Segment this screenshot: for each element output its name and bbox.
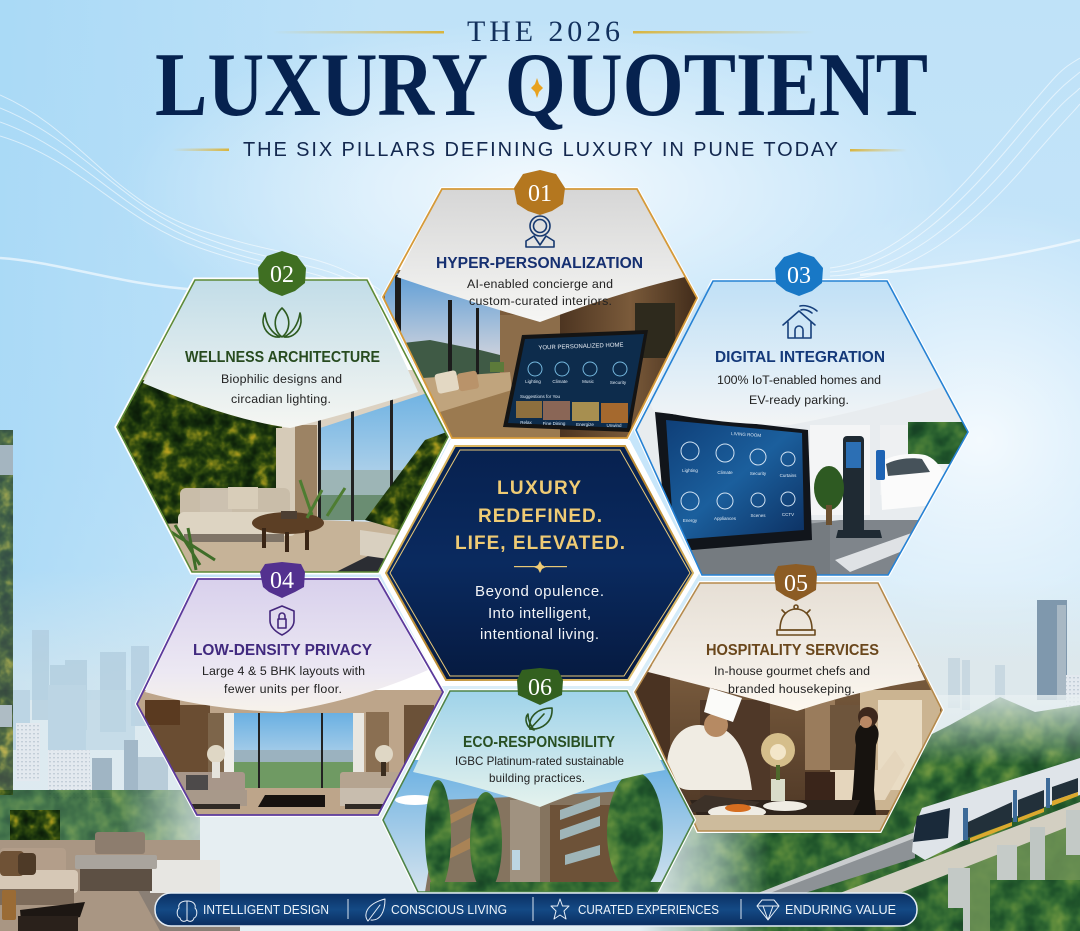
text block — [714, 664, 870, 696]
tablet: Fine Dining — [543, 421, 566, 426]
tablet: Lighting — [525, 379, 541, 384]
number badge 02: 02 — [270, 262, 294, 288]
number badge 05: 05 — [784, 571, 808, 597]
text block: building practices. — [489, 772, 585, 785]
tablet: Music — [582, 379, 595, 384]
panel: 03 digital integration: Lighting — [682, 468, 698, 473]
metro viaduct — [758, 802, 1080, 931]
icon: shield — [270, 606, 294, 635]
left skyline and terrace — [0, 430, 430, 931]
panel caption area — [145, 579, 428, 712]
panel: 06 eco-responsibility — [380, 691, 700, 895]
tablet: Unwind — [606, 423, 622, 428]
number badge 04 — [260, 562, 305, 598]
text block: AI-enabled concierge and — [467, 277, 613, 291]
text block: Into intelligent, — [488, 605, 591, 622]
heading: HOSPITALITY SERVICES — [706, 642, 879, 659]
value: curated experiences — [551, 899, 719, 919]
number badge 05 — [774, 564, 817, 601]
text block — [455, 755, 624, 785]
text block — [467, 277, 613, 308]
heading: LOW-DENSITY PRIVACY — [193, 642, 373, 659]
panel: 01 hyper-personalization — [380, 189, 700, 440]
panel caption area — [143, 280, 418, 428]
title: the 2026: THE 2026 — [467, 15, 620, 48]
text block — [475, 583, 604, 643]
value: curated experiences: CURATED EXPERIENCES — [578, 903, 719, 917]
text block: branded housekeping. — [728, 682, 855, 696]
value: conscious living — [366, 899, 507, 921]
panel caption area — [413, 691, 665, 807]
value: intelligent design — [177, 901, 329, 921]
heading: DIGITAL INTEGRATION — [715, 349, 885, 366]
panel: 03 digital integration: Appliances — [714, 516, 737, 521]
icon: cloche — [777, 605, 815, 635]
tablet: Energize — [576, 422, 594, 427]
value: enduring value — [757, 900, 896, 920]
text block: fewer units per floor. — [224, 682, 342, 696]
number badge 06 — [517, 668, 563, 705]
icon: lotus — [263, 308, 301, 337]
divider ornament — [514, 561, 567, 573]
metro train — [912, 758, 1080, 860]
panel: 03 digital integration: CCTV — [782, 512, 794, 517]
text block: EV-ready parking. — [749, 393, 849, 407]
text block — [717, 373, 881, 407]
panel: center message — [383, 443, 696, 683]
tablet: YOUR PERSONALIZED HOME — [538, 343, 624, 351]
tablet: Security — [610, 380, 627, 385]
title block — [155, 15, 928, 161]
tablet: Suggestions for You — [520, 394, 561, 399]
text block: In-house gourmet chefs and — [714, 664, 870, 678]
number badge 02 — [258, 251, 306, 296]
text block: custom-curated interiors. — [469, 294, 612, 308]
heading: LUXURY — [497, 478, 581, 499]
panel caption area — [648, 583, 925, 711]
panel: 03 digital integration: Curtains — [780, 473, 797, 478]
value: intelligent design: INTELLIGENT DESIGN — [203, 903, 329, 917]
subtitle: THE SIX PILLARS DEFINING LUXURY IN PUNE TODAY — [243, 139, 838, 161]
text block: Biophilic designs and — [221, 372, 342, 386]
panel: 03 digital integration: Energy — [683, 518, 698, 523]
tablet: Relax — [520, 420, 532, 425]
panel: 02 wellness architecture — [110, 280, 455, 575]
right hills, skyline and metro — [640, 580, 1080, 931]
title: luxury quotient: LUXURY QUOTIENT — [155, 34, 928, 135]
panel: 03 digital integration: LIVING ROOM — [731, 431, 761, 438]
text block — [221, 372, 342, 406]
text block: Beyond opulence. — [475, 583, 604, 600]
number badge 03 — [775, 252, 823, 296]
text block: 100% IoT-enabled homes and — [717, 373, 881, 387]
icon: leaves — [526, 708, 552, 730]
text block: IGBC Platinum-rated sustainable — [455, 755, 624, 768]
number badge 03: 03 — [787, 263, 811, 289]
icon: concierge — [526, 216, 554, 247]
text block: Large 4 & 5 BHK layouts with — [202, 664, 365, 678]
heading: REDEFINED. — [478, 506, 602, 527]
text block — [202, 664, 365, 696]
heading: WELLNESS ARCHITECTURE — [185, 349, 380, 366]
tablet: Climate — [552, 379, 568, 384]
tablet — [503, 330, 648, 432]
heading: LIFE, ELEVATED. — [455, 533, 625, 554]
heading — [455, 478, 625, 554]
text block: circadian lighting. — [231, 392, 331, 406]
panel: 04 low-density privacy — [130, 579, 450, 820]
heading: HYPER-PERSONALIZATION — [436, 255, 643, 272]
bottom values bar — [155, 893, 917, 926]
value: enduring value: ENDURING VALUE — [785, 903, 896, 917]
panel: 05 hospitality services — [630, 583, 950, 835]
text block: intentional living. — [480, 626, 599, 643]
number badge 04: 04 — [270, 568, 294, 594]
number badge 06: 06 — [528, 675, 552, 701]
panel: 03 digital integration: Scenes — [750, 513, 766, 518]
heading: ECO-RESPONSIBILITY — [463, 734, 616, 751]
icon: smart home — [783, 306, 817, 338]
car — [880, 454, 946, 510]
panel: 03 digital integration: Security — [750, 471, 767, 476]
panel: 03 digital integration: Climate — [717, 470, 733, 475]
panel: 03 digital integration — [630, 281, 970, 580]
panel caption area — [640, 281, 943, 425]
number badge 01 — [514, 170, 565, 215]
value: conscious living: CONSCIOUS LIVING — [391, 903, 507, 917]
number badge 01: 01 — [528, 181, 552, 207]
panel caption area — [397, 189, 685, 322]
